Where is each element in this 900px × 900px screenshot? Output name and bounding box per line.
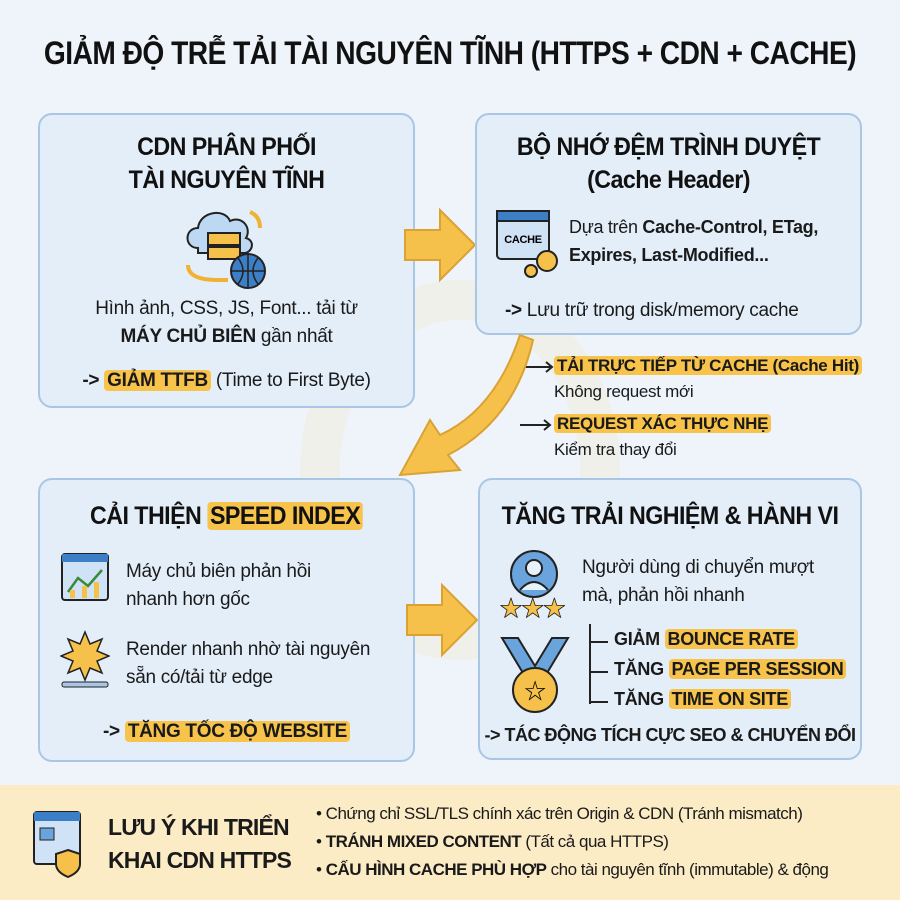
- text: smooth: mà, phản hồi nhanh: [582, 585, 745, 606]
- heading: cache: (Cache Header): [587, 166, 750, 194]
- icon: chart: [61, 553, 109, 601]
- list: notes: • CẤU HÌNH CACHE PHÙ HỢP cho tài nguyên tĩnh (immutable) & động: [316, 860, 828, 879]
- icon: secure browser: [33, 811, 81, 878]
- icon: burst: [60, 630, 110, 688]
- branch: cache hit: Không request mới: [554, 382, 693, 401]
- list: metrics: TĂNG TIME ON SITE: [614, 689, 788, 709]
- list: notes: [316, 804, 828, 879]
- arrow: curved down-left: [398, 334, 534, 476]
- heading: notes: LƯU Ý KHI TRIỂN: [108, 814, 289, 840]
- panel: CDN: [38, 113, 415, 408]
- text: smooth: Người dùng di chuyển mượt: [582, 557, 814, 578]
- heading: cache: BỘ NHỚ ĐỆM TRÌNH DUYỆT: [517, 133, 820, 161]
- text: render: sẵn có/tải từ edge: [126, 667, 273, 688]
- heading: CDN: TÀI NGUYÊN TĨNH: [129, 166, 324, 194]
- text: render: [126, 639, 370, 688]
- heading: notes: [108, 814, 291, 873]
- icon: cache window: CACHE: [504, 234, 542, 246]
- heading: notes: KHAI CDN HTTPS: [108, 847, 291, 873]
- list: notes: • Chứng chỉ SSL/TLS chính xác trên Origin & CDN (Tránh mismatch): [316, 804, 802, 823]
- branch: cache hit: REQUEST XÁC THỰC NHẸ: [557, 414, 768, 433]
- text: edge response: nhanh hơn gốc: [126, 589, 250, 610]
- callout: speed: -> TĂNG TỐC ĐỘ WEBSITE: [103, 721, 347, 742]
- icon: cloud server globe: [186, 210, 266, 289]
- branch: cache hit: TẢI TRỰC TIẾP TỪ CACHE (Cache Hit): [557, 356, 859, 375]
- branch: cache hit: Kiểm tra thay đổi: [554, 440, 676, 459]
- icon: user stars: [500, 550, 565, 618]
- text: edge response: [126, 561, 311, 610]
- heading: experience: TĂNG TRẢI NGHIỆM & HÀNH VI: [502, 502, 838, 530]
- arrow: right bottom: [406, 582, 478, 658]
- text: cache headers: [569, 217, 818, 265]
- text: disk cache: -> Lưu trữ trong disk/memory cache: [505, 300, 798, 321]
- text: edge response: Máy chủ biên phản hồi: [126, 561, 311, 582]
- list: metrics: GIẢM BOUNCE RATE: [614, 629, 795, 649]
- icon: cache window: [496, 210, 558, 278]
- text: CDN description: MÁY CHỦ BIÊN gần nhất: [121, 326, 332, 347]
- panel: speed index: [38, 478, 415, 762]
- panel: browser cache: [475, 113, 862, 335]
- list: metrics: [589, 624, 846, 709]
- callout: SEO: -> TÁC ĐỘNG TÍCH CỰC SEO & CHUYỂN ĐỔI: [485, 725, 855, 745]
- icon: medal: [500, 637, 570, 713]
- text: CDN description: [95, 298, 358, 347]
- list: notes: • TRÁNH MIXED CONTENT (Tất cả qua HTTPS): [316, 832, 668, 851]
- heading: speed index: CẢI THIỆN SPEED INDEX: [90, 502, 360, 530]
- heading: CDN: CDN PHÂN PHỐI: [137, 133, 316, 161]
- heading: CDN: [128, 132, 324, 194]
- text: CDN description: Hình ảnh, CSS, JS, Font... tải từ: [95, 298, 358, 319]
- text: cache headers: Dựa trên Cache-Control, ETag,: [569, 217, 818, 237]
- watermark: [300, 280, 620, 660]
- callout: TTFB: -> GIẢM TTFB (Time to First Byte): [82, 370, 371, 391]
- text: render: Render nhanh nhờ tài nguyên: [126, 639, 370, 660]
- title: GIẢM ĐỘ TRỄ TẢI TÀI NGUYÊN TĨNH (HTTPS + CDN + CACHE): [44, 35, 856, 71]
- branch: cache hit: [520, 356, 862, 459]
- icon: medal: ☆: [524, 679, 546, 704]
- heading: cache: [517, 132, 820, 194]
- list: metrics: TĂNG PAGE PER SESSION: [614, 659, 843, 679]
- panel: experience: [478, 478, 862, 760]
- text: smooth: [582, 557, 814, 606]
- arrow: right top: [404, 208, 475, 282]
- text: cache headers: Expires, Last-Modified...: [569, 245, 769, 265]
- panel: notes footer: [0, 785, 900, 900]
